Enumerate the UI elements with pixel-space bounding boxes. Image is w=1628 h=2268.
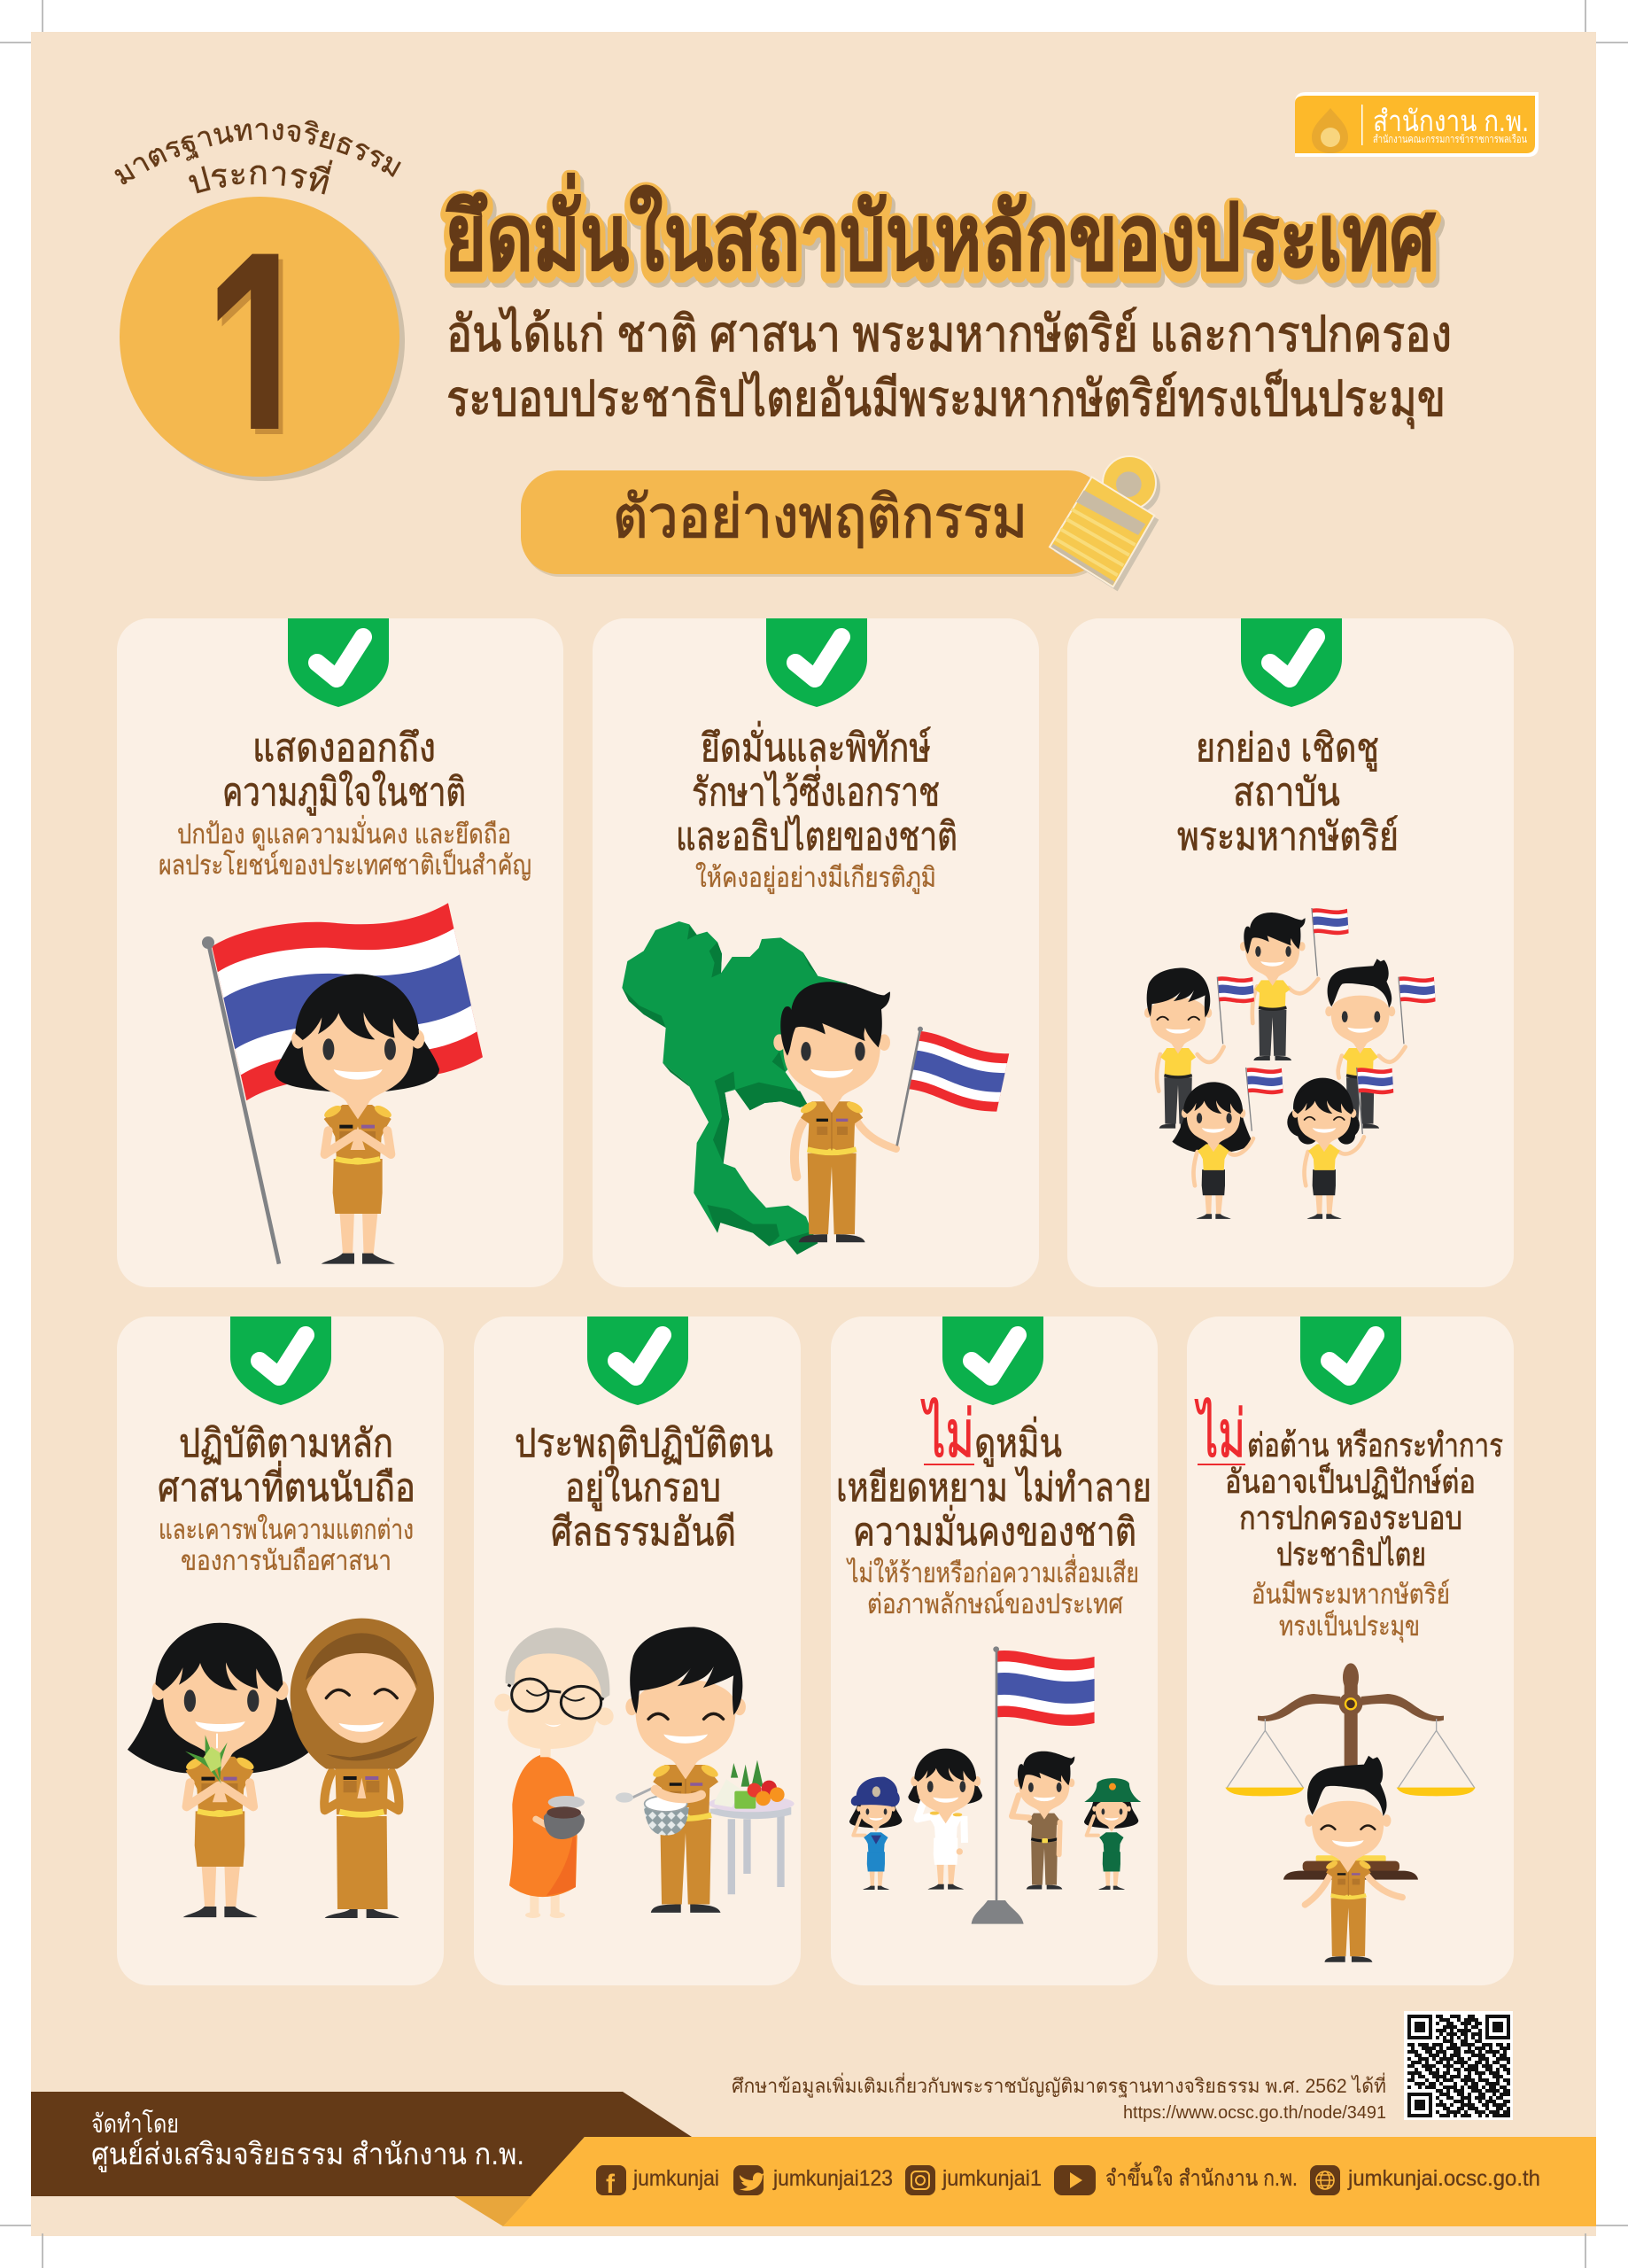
twitter (733, 2165, 893, 2195)
man in brown uniform (1012, 1751, 1074, 1889)
organiser text: ศูนย์ส่งเสริมจริยธรรม สำนักงาน ก.พ. (91, 2138, 524, 2172)
base (1283, 1855, 1418, 1880)
woman in white uniform (908, 1749, 982, 1890)
heading text: ต่อต้าน หรือกระทำการ (1247, 1427, 1503, 1464)
youtube (1054, 2162, 1298, 2195)
twitter: jumkunjai123 (772, 2166, 893, 2191)
facebook (596, 2165, 719, 2199)
red emphasis word (921, 1397, 974, 1471)
table with offerings (709, 1760, 795, 1894)
person bottom right (1287, 1063, 1393, 1219)
heading text: ประชาธิปไตย (1276, 1535, 1426, 1573)
heading text: และอธิปไตยของชาติ (676, 814, 957, 858)
heading text: ปฏิบัติตามหลัก (179, 1422, 393, 1465)
red emphasis word: ไม่ (921, 1397, 974, 1471)
logo: สำนักงาน ก.พ.: สำนักงาน ก.พ. (1373, 105, 1529, 137)
youtube: จำขึ้นใจ สำนักงาน ก.พ. (1105, 2162, 1298, 2191)
red emphasis word: ไม่ (1195, 1397, 1245, 1471)
officer with rice basket (616, 1627, 746, 1913)
description text: ผลประโยชน์ของประเทศชาติเป็นสำคัญ (159, 849, 531, 881)
icon: epaulette (1050, 456, 1160, 591)
organiser text: จัดทำโดย (91, 2109, 179, 2139)
heading text (158, 1422, 415, 1510)
facebook: jumkunjai (632, 2166, 719, 2191)
heading text (222, 726, 466, 816)
illustration: woman with Thai flag (202, 894, 485, 1264)
heading text (1225, 1427, 1503, 1573)
woman with flower offering (128, 1623, 308, 1917)
organiser text (91, 2109, 524, 2172)
person top (1240, 904, 1349, 1060)
footer bar: social media (454, 2137, 1596, 2226)
icon: check shield (1241, 618, 1342, 707)
illustration: monk and alms offering (494, 1627, 795, 1918)
logo: สำนักงาน ก.พ.: สำนักงานคณะกรรมการข้าราชการพลเรือน (1373, 133, 1527, 145)
description text (846, 1554, 1139, 1619)
description text (159, 1514, 414, 1576)
description text: ให้คงอยู่อย่างมีเกียรติภูมิ (695, 862, 936, 894)
heading text: ดูหมิ่น (974, 1416, 1062, 1467)
more information text (732, 2072, 1386, 2123)
woman in hijab (291, 1619, 434, 1918)
more information text: ศึกษาข้อมูลเพิ่มเติมเกี่ยวกับพระราชบัญญัติมาตรฐานทางจริยธรรม พ.ศ. 2562 ได้ที่ (732, 2072, 1386, 2098)
panel 7: do not oppose democracy (1187, 1317, 1514, 1985)
heading text (1177, 726, 1399, 858)
subtitle (446, 306, 1452, 429)
heading text: ความภูมิใจในชาติ (222, 770, 466, 816)
panel 6: do not insult the nation (831, 1317, 1158, 1985)
green scout girl (1084, 1778, 1141, 1890)
heading text (676, 720, 957, 858)
icon: check shield (766, 618, 867, 707)
panel 3: honour the monarchy (1067, 618, 1514, 1287)
flag pole and flag (972, 1642, 1095, 1924)
footer bar: organiser (31, 2092, 692, 2196)
heading text: อยู่ในกรอบ (565, 1465, 721, 1511)
heading text: แสดงออกถึง (252, 726, 436, 770)
subtitle: อันได้แก่ ชาติ ศาสนา พระมหากษัตริย์ และการปกครอง (446, 306, 1452, 361)
heading text: อันอาจเป็นปฏิปักษ์ต่อ (1225, 1461, 1476, 1500)
icon: check shield (1300, 1317, 1401, 1405)
panel 2: uphold sovereignty (593, 618, 1039, 1287)
badge circle (120, 197, 405, 481)
scales (1225, 1663, 1476, 1796)
heading text: ยกย่อง เชิดชู (1196, 726, 1379, 772)
number 1: 1 (204, 187, 316, 529)
illustration: saluting flag (849, 1642, 1141, 1924)
description text: และเคารพในความแตกต่าง (159, 1514, 414, 1545)
heading text (515, 1422, 773, 1554)
heading text: พระมหากษัตริย์ (1177, 815, 1399, 858)
instagram (905, 2165, 1042, 2195)
arc heading: มาตรฐานทางจริยธรรม (115, 120, 401, 184)
subtitle: ระบอบประชาธิปไตยอันมีพระมหากษัตริย์ทรงเป็นประมุข (446, 369, 1446, 429)
icon: check shield (230, 1317, 331, 1405)
blue scout girl (849, 1777, 902, 1890)
heading text: ศาสนาที่ตนนับถือ (158, 1460, 415, 1510)
facebook: f (606, 2170, 616, 2199)
number 1: 1 (208, 192, 321, 534)
monk (494, 1627, 614, 1918)
logo: สำนักงาน ก.พ. (1295, 92, 1539, 157)
person right (1325, 959, 1436, 1129)
website (1310, 2165, 1540, 2195)
heading text: ศีลธรรมอันดี (551, 1511, 736, 1554)
heading text: ประพฤติปฏิบัติตน (515, 1422, 773, 1465)
description text (159, 815, 531, 881)
panel 4: follow one's religion (117, 1317, 444, 1985)
behaviour examples banner (521, 456, 1160, 591)
icon: check shield (587, 1317, 688, 1405)
QR code (1404, 2011, 1513, 2120)
description text: ต่อภาพลักษณ์ของประเทศ (867, 1588, 1123, 1619)
icon: check shield (288, 618, 389, 707)
instagram: jumkunjai1 (942, 2166, 1042, 2191)
description text: อันมีพระมหากษัตริย์ (1252, 1579, 1450, 1610)
more information text: https://www.ocsc.go.th/node/3491 (1123, 2103, 1386, 2123)
heading text: เหยียดหยาม ไม่ทำลาย (836, 1465, 1151, 1510)
panel 1: pride in the nation (117, 618, 563, 1287)
number badge with arc heading (115, 120, 405, 481)
arc heading: ประการที่ (189, 159, 333, 195)
heading text: รักษาไว้ซึ่งเอกราช (692, 765, 940, 814)
illustration: five people with flags (1144, 904, 1436, 1219)
description text (1252, 1579, 1450, 1643)
person bottom left (1172, 1063, 1283, 1219)
illustration: map of Thailand with officer (622, 921, 1012, 1254)
banner label: ตัวอย่างพฤติกรรม (613, 484, 1027, 549)
description text: ทรงเป็นประมุข (1279, 1610, 1420, 1643)
red emphasis word (1195, 1397, 1245, 1471)
description text: ไม่ให้ร้ายหรือก่อความเสื่อมเสีย (846, 1554, 1139, 1588)
heading text: ยึดมั่นและพิทักษ์ (701, 720, 931, 770)
officer (1305, 1756, 1402, 1962)
heading text (836, 1416, 1151, 1554)
description text: ของการนับถือศาสนา (181, 1545, 391, 1576)
heading text: การปกครองระบอบ (1239, 1500, 1462, 1536)
heading text: ความมั่นคงของชาติ (853, 1504, 1136, 1554)
illustration: scales of justice with officer (1225, 1663, 1476, 1962)
illustration: two women (128, 1619, 434, 1918)
panel 5: moral conduct (474, 1317, 801, 1985)
number 1 (218, 253, 283, 434)
person left (1144, 967, 1254, 1129)
website: jumkunjai.ocsc.go.th (1347, 2166, 1540, 2191)
icon: check shield (942, 1317, 1043, 1405)
description text: ปกป้อง ดูแลความมั่นคง และยึดถือ (177, 815, 511, 850)
heading text: สถาบัน (1233, 771, 1340, 814)
